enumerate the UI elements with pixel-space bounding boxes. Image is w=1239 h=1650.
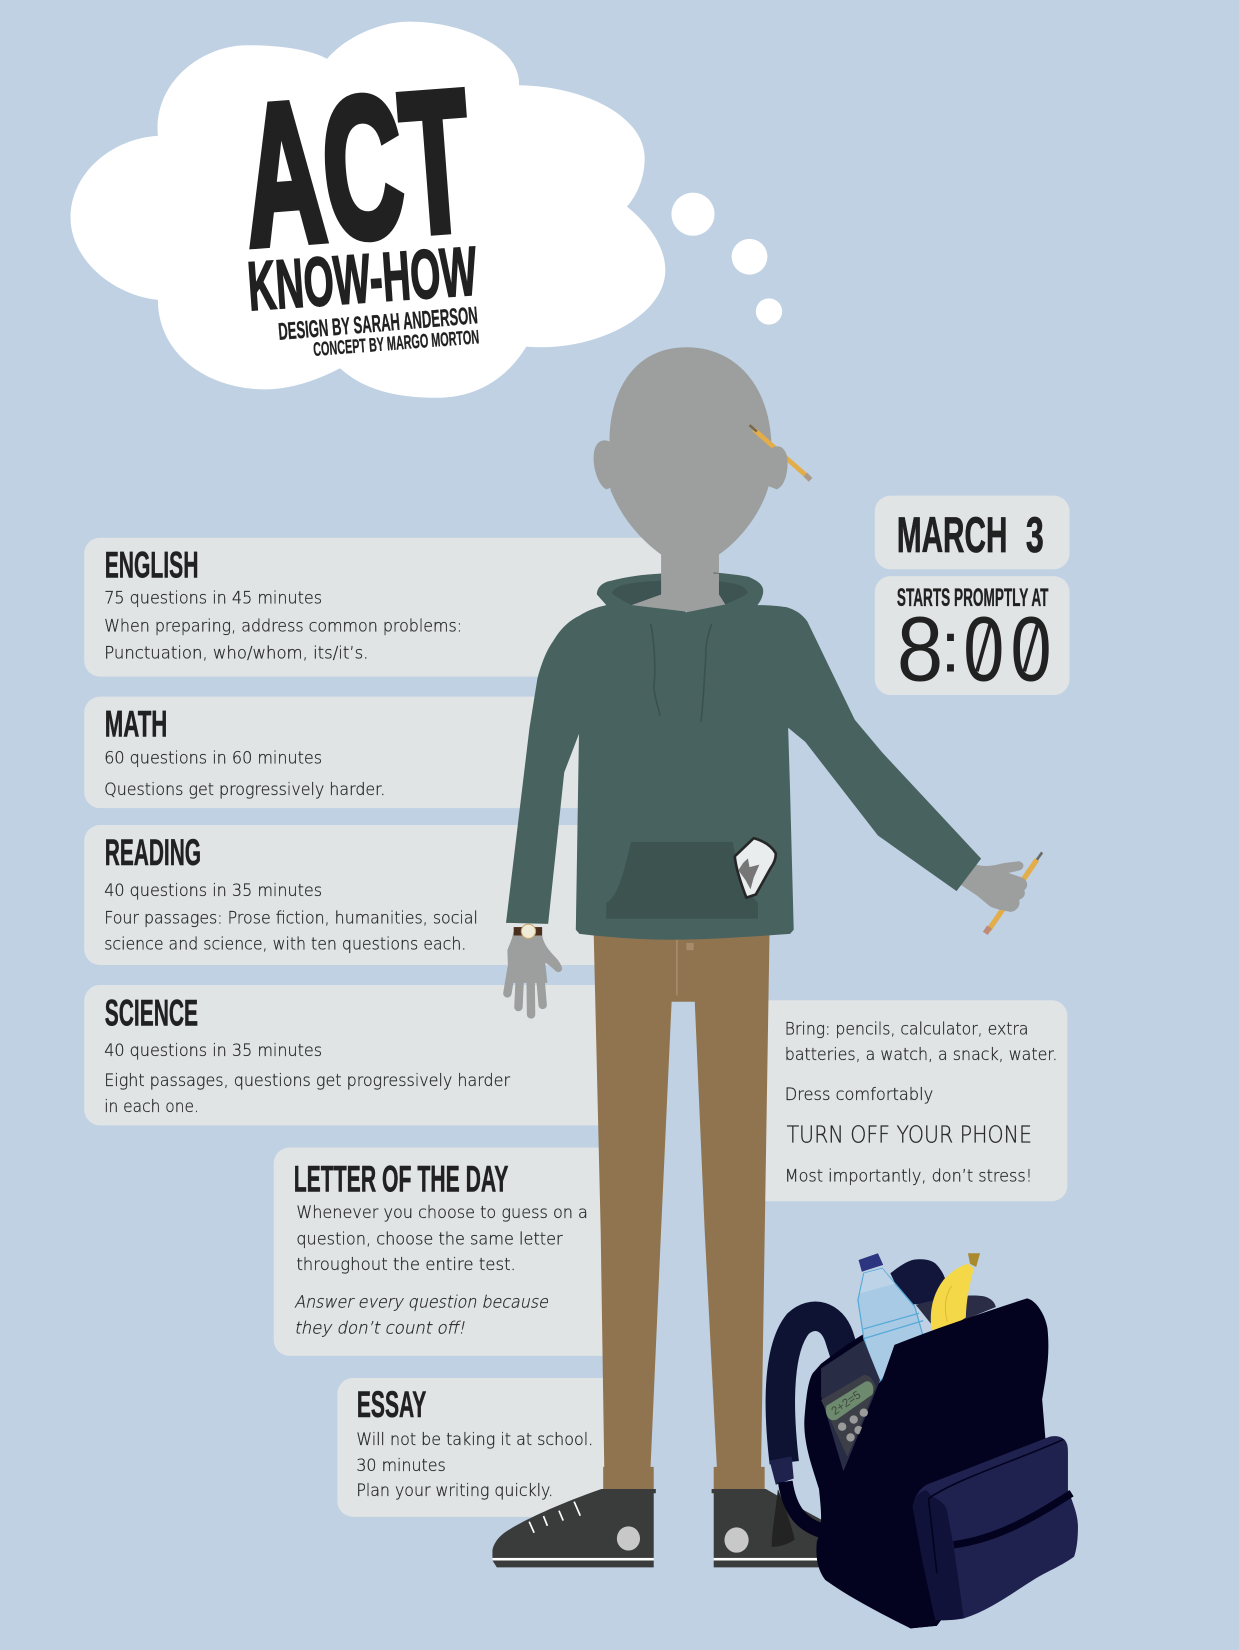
Essay details: Plan your writing quickly.: [356, 1480, 553, 1500]
calculator buttons: [838, 1408, 868, 1442]
panel: Math: [84, 697, 632, 808]
calculator readout: 2+2=5: [830, 1389, 863, 1418]
trousers: [594, 934, 770, 1490]
digital time: :: [941, 607, 961, 687]
Letter of the day details: they don’t count off!: [293, 1319, 468, 1339]
Math details: Questions get progressively harder.: [104, 779, 385, 799]
right shoe: [712, 1489, 823, 1567]
pocket seam: [928, 1440, 1063, 1573]
water bottle: [858, 1253, 923, 1383]
left ear: [594, 440, 616, 489]
Letter of the day details: [293, 1202, 588, 1339]
panel: Reading: [84, 825, 632, 965]
heading: Science: SCIENCE: [105, 992, 198, 1033]
panel: Science: [84, 985, 632, 1125]
shoulder strap: [780, 1316, 847, 1463]
backpack: [770, 1253, 1078, 1628]
bring list: Bring: pencils, calculator, extra: [785, 1018, 1028, 1038]
cloud shape: [71, 22, 665, 398]
pencil in hand: [985, 852, 1042, 933]
Reading details: Four passages: Prose fiction, humanities, social: [104, 907, 478, 927]
heading: Math: MATH: [105, 704, 167, 745]
hood lining left: [612, 581, 662, 605]
English details: 75 questions in 45 minutes: [104, 587, 322, 607]
inner panel: [821, 1340, 880, 1472]
phone in pocket: [735, 838, 776, 898]
fly seam: [676, 940, 678, 995]
lower strap: [785, 1482, 826, 1532]
banana: [931, 1253, 980, 1336]
title: ACT: ACT: [236, 49, 477, 288]
panel: Letter of the day: [274, 1148, 632, 1356]
panel: date: [875, 496, 1070, 569]
digital time: 8: [897, 598, 943, 700]
panel: Essay: [337, 1378, 627, 1517]
strap buckle: [770, 1456, 794, 1485]
thought bubbles: [671, 193, 782, 325]
date number: 3: [1026, 506, 1044, 563]
Essay details: Will not be taking it at school.: [356, 1429, 593, 1449]
subtitle: KNOW-HOW: KNOW-HOW: [245, 232, 480, 325]
Reading details: 40 questions in 35 minutes: [104, 880, 322, 900]
stress note: Most importantly, don’t stress!: [785, 1166, 1032, 1186]
right ear: [768, 446, 788, 489]
Letter of the day details: Whenever you choose to guess on a: [296, 1202, 588, 1222]
Science details: in each one.: [104, 1096, 199, 1116]
start label: STARTS PROMPTLY AT: [897, 584, 1048, 612]
panel: start time: [875, 576, 1070, 700]
dress note: Dress comfortably: [785, 1084, 933, 1104]
English details: When preparing, address common problems:: [104, 616, 462, 636]
backpack front flap: [843, 1298, 1053, 1628]
bring list: batteries, a watch, a snack, water.: [785, 1044, 1057, 1064]
digital time: 0: [1011, 598, 1052, 700]
digital time: [897, 598, 1052, 700]
hoodie pocket: [606, 842, 758, 919]
heading: Letter of the day: LETTER OF THE DAY: [294, 1158, 508, 1199]
calculator: [821, 1375, 876, 1457]
panel: English: [84, 538, 674, 677]
digital time: 0: [963, 598, 1004, 700]
pencil behind ear: [750, 425, 811, 480]
heading: Reading: READING: [105, 832, 201, 873]
bring list: [785, 1018, 1057, 1064]
Reading details: [104, 880, 478, 953]
right hand: [961, 861, 1027, 912]
watch: [514, 924, 542, 938]
pocket side panel: [913, 1490, 964, 1620]
heading: English: ENGLISH: [105, 545, 198, 586]
English details: Punctuation, who/whom, its/it’s.: [104, 642, 368, 662]
head: [609, 347, 772, 612]
backpack rear body: [804, 1334, 937, 1628]
Science details: 40 questions in 35 minutes: [104, 1040, 322, 1060]
Essay details: [356, 1429, 593, 1500]
left shoe: [492, 1489, 656, 1567]
pocket zipper: [954, 1493, 1072, 1545]
hood lining right: [714, 581, 748, 605]
credit: design: DESIGN BY SARAH ANDERSON: [277, 302, 479, 346]
credit: concept: CONCEPT BY MARGO MORTON: [312, 326, 480, 361]
Science details: Eight passages, questions get progressively harder: [104, 1070, 510, 1090]
Letter of the day details: Answer every question because: [293, 1293, 551, 1312]
English details: [104, 587, 462, 662]
Math details: 60 questions in 60 minutes: [104, 747, 322, 767]
Reading details: science and science, with ten questions each.: [104, 933, 466, 953]
Math details: [104, 747, 385, 799]
panel: test day reminders: [726, 1000, 1067, 1201]
Essay details: 30 minutes: [356, 1455, 446, 1475]
phone note: TURN OFF YOUR PHONE: [787, 1123, 1032, 1149]
hoodie strings: [651, 624, 712, 722]
thought cloud with title: [71, 22, 665, 398]
neck front: [632, 574, 725, 612]
rear lip: [916, 1295, 996, 1331]
Letter of the day details: throughout the entire test.: [296, 1254, 516, 1274]
Science details: [104, 1040, 510, 1116]
left hand: [507, 932, 562, 1014]
trouser button: [686, 943, 694, 950]
hoodie: [506, 572, 981, 940]
front pocket: [913, 1436, 1078, 1620]
date text: MARCH: [897, 506, 1007, 563]
top handle: [890, 1259, 945, 1305]
student figure: [492, 347, 1042, 1567]
Letter of the day details: question, choose the same letter: [296, 1228, 563, 1248]
heading: Essay: ESSAY: [357, 1384, 426, 1425]
